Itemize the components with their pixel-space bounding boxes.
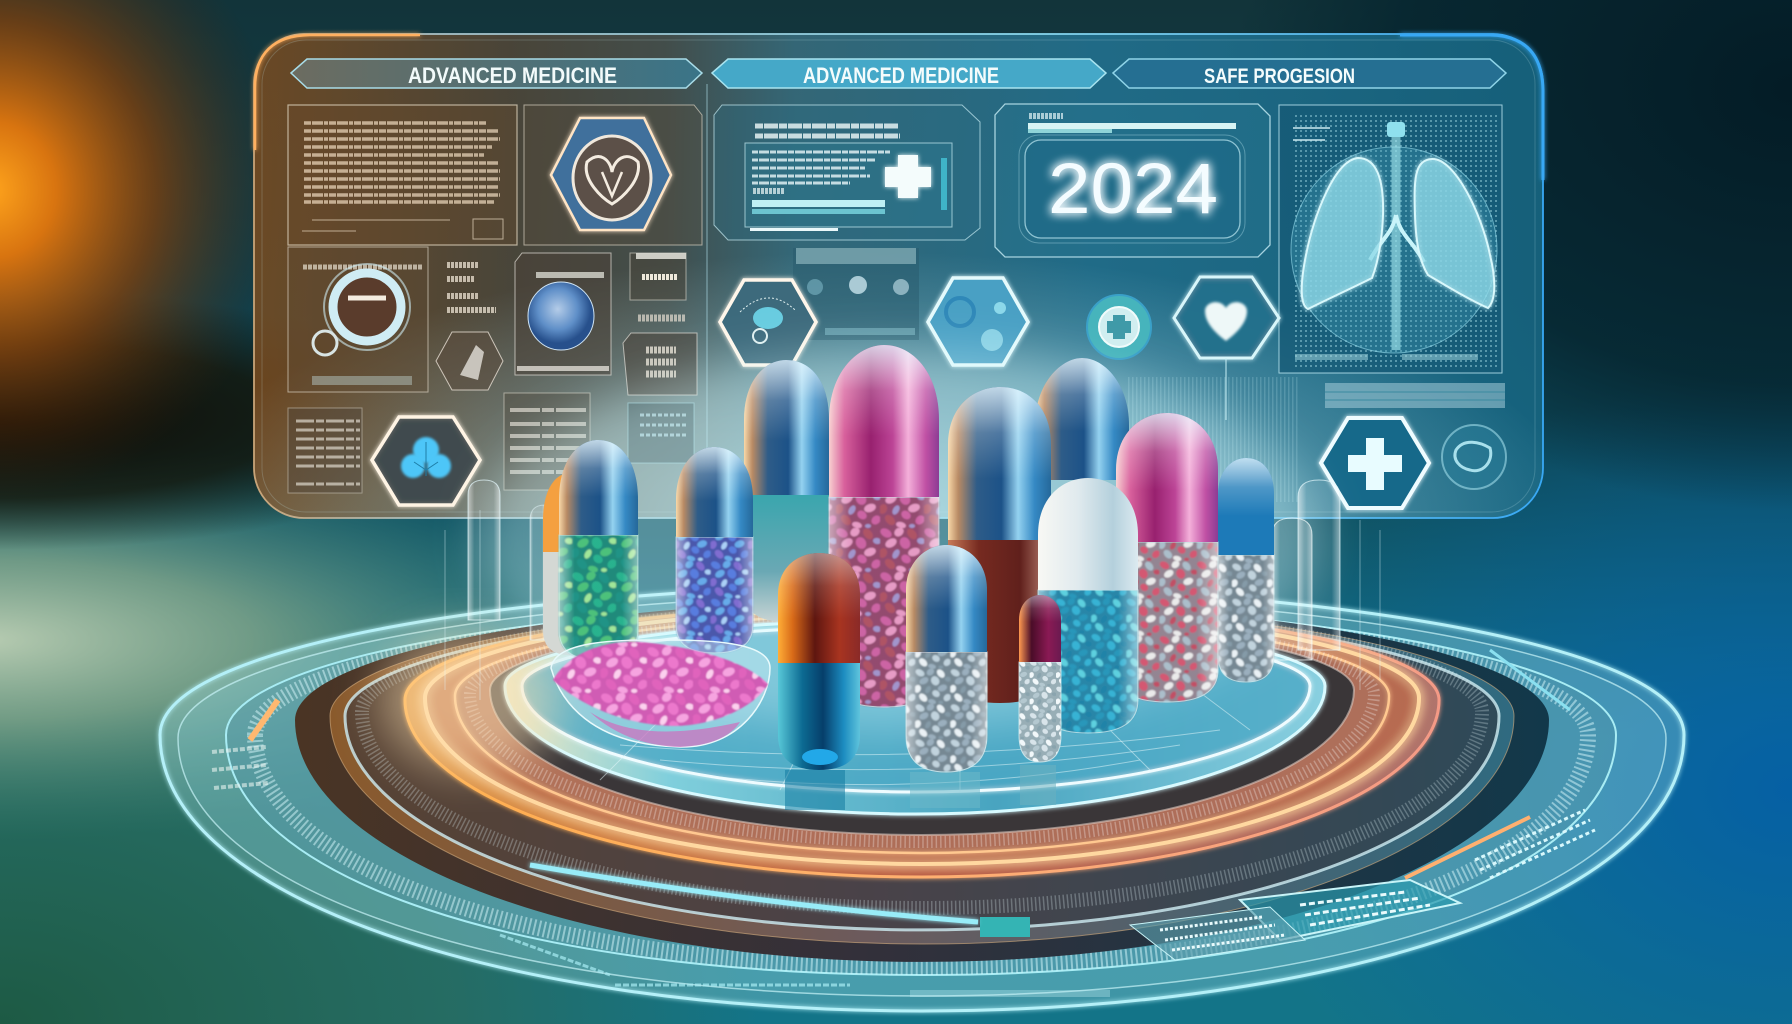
capsule: far right blue	[1218, 458, 1274, 682]
lower middle text card	[504, 393, 694, 490]
header tab: safe progression: SAFE PROGESION	[1204, 65, 1355, 88]
outer glass ring	[160, 585, 1684, 1011]
capsule: white with teal pellets	[1038, 478, 1138, 733]
hexagon icon: heart	[1174, 277, 1279, 420]
capsule: right magenta	[1116, 413, 1218, 702]
circle icon: cell	[1442, 425, 1506, 489]
circular holographic platform	[160, 585, 1684, 1011]
capsule: tall magenta	[829, 345, 939, 707]
inner glass plate	[505, 620, 1325, 814]
dark metallic band	[295, 600, 1549, 962]
translucent glass tubes	[445, 480, 1380, 700]
capsules	[543, 345, 1274, 772]
small data cards	[623, 253, 697, 395]
glowing orange rings	[405, 604, 1439, 877]
reflections below capsules	[785, 765, 1056, 810]
faded central data card	[793, 248, 919, 340]
capsule: back blue with teal base	[744, 360, 829, 622]
medical cross card	[714, 105, 980, 240]
warm glow on left of plate	[380, 630, 560, 770]
capsule: blue with brown base	[948, 387, 1051, 703]
short list	[447, 265, 496, 310]
capsule: blue with white pellets	[906, 545, 987, 772]
emblem hexagon with heart	[524, 105, 702, 245]
pink pellet dish	[551, 640, 770, 747]
circle icon: medical badge	[1087, 295, 1151, 359]
2024 year display	[995, 104, 1270, 257]
blue hexagon icon	[372, 417, 480, 505]
capsule: small purple	[1019, 595, 1061, 762]
small hexagon	[436, 332, 503, 390]
globe module	[515, 253, 611, 375]
capsule: green pellets	[559, 440, 638, 660]
holographic dashboard panel	[254, 34, 1543, 518]
hexagon icon: cells	[928, 278, 1028, 365]
lower left text card	[288, 408, 362, 493]
hexagon icon: molecule	[720, 280, 816, 365]
capsule: blue pellets	[676, 447, 753, 653]
hexagon icon: medical cross	[1321, 418, 1429, 508]
header tab: advanced medicine centre	[712, 59, 1106, 88]
textured grid region	[1126, 377, 1505, 502]
capsule: red and teal	[778, 553, 860, 770]
tick marks and data cards on the ring	[212, 650, 1595, 997]
dark inner ring	[490, 618, 1354, 835]
header tab: advanced medicine left	[291, 59, 702, 88]
capsule: orange sliver behind green	[543, 473, 570, 655]
capsule: back blue upper right	[1035, 358, 1129, 480]
soft glow behind capsules	[480, 350, 1320, 730]
header tab: safe progression	[1113, 59, 1506, 88]
left text block	[288, 105, 517, 245]
header tab: advanced medicine centre: ADVANCED MEDICINE	[803, 63, 999, 88]
header tab: advanced medicine left: ADVANCED MEDICINE	[408, 63, 617, 88]
ring gauge module	[288, 247, 428, 392]
lung scan	[1279, 105, 1502, 373]
2024 year display: 2024	[1048, 150, 1218, 229]
